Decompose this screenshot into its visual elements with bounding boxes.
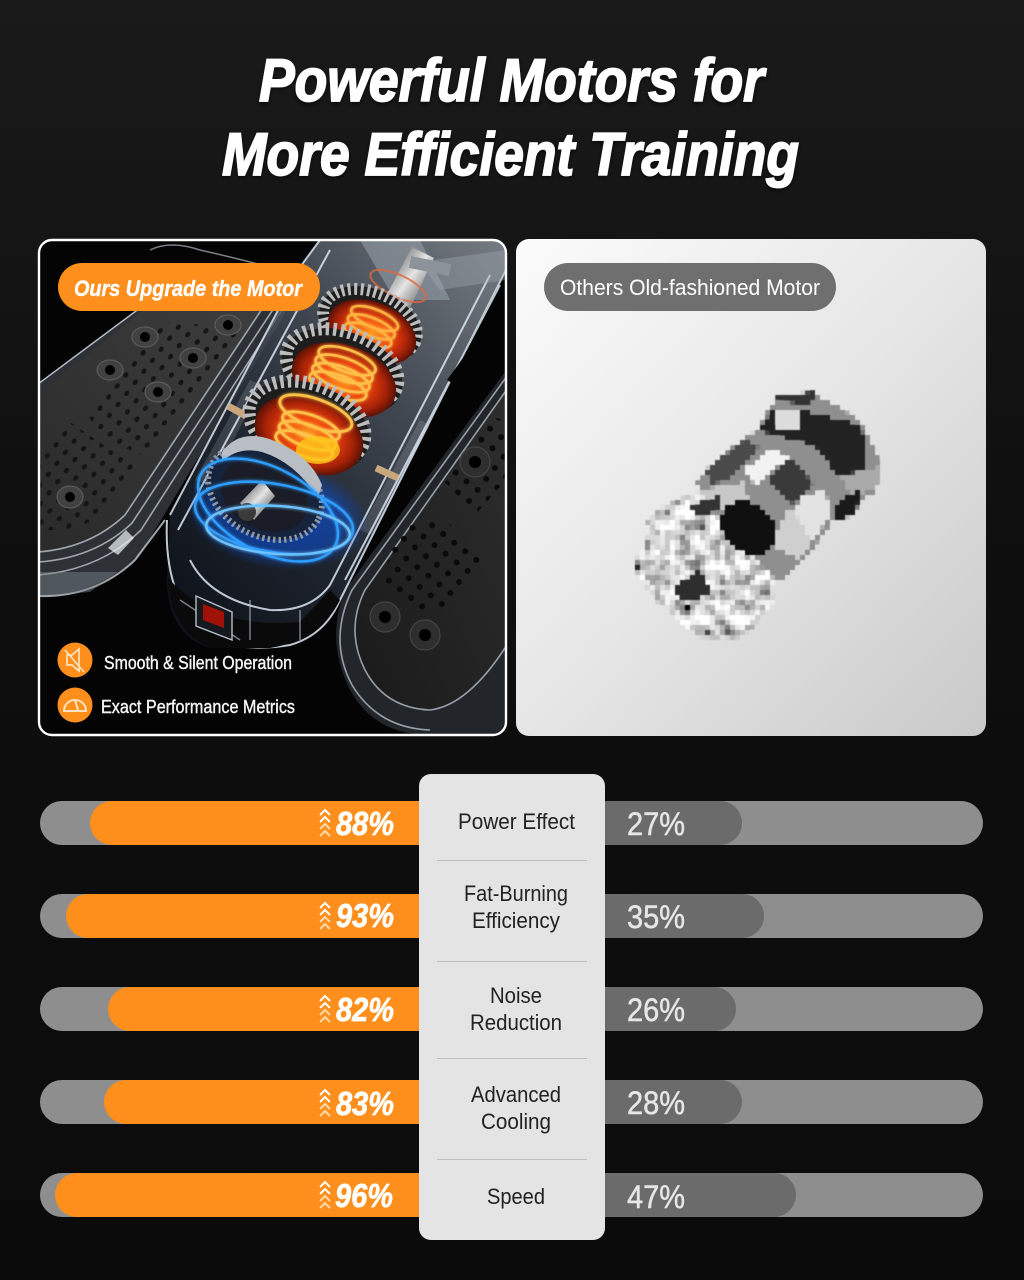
panel border (39, 240, 506, 735)
panel: metric labels: Speed (487, 1184, 545, 1209)
title (222, 47, 799, 188)
icon: suction cups, right pedal (370, 447, 490, 650)
illustration: blue glowing gear (189, 436, 366, 568)
lower motor housing with mottled detail (632, 490, 790, 643)
panel: metric labels: Power Effect (458, 809, 575, 834)
panel: metric labels: Reduction (470, 1010, 562, 1035)
feature: exact performance metrics (58, 688, 295, 722)
row: advanced cooling (40, 1080, 983, 1124)
illustration: gear 2 (280, 322, 404, 418)
badge: others old-fashioned motor: Others Old-fashioned Motor (560, 275, 820, 300)
illustration: gear 3 (242, 374, 372, 476)
icon: suction cups, left pedal (57, 315, 241, 508)
row: speed: 47% (627, 1179, 685, 1215)
panel: metric labels: Cooling (481, 1109, 551, 1134)
row: power effect: 27% (627, 806, 685, 842)
panel: metric labels: Advanced (471, 1082, 561, 1107)
badge: ours upgrade the motor: Ours Upgrade the Motor (74, 276, 303, 301)
panel: metric labels (419, 774, 605, 1240)
badge: ours upgrade the motor (58, 263, 320, 311)
panel: ours upgraded motor (38, 240, 510, 735)
dark centre of motor (675, 490, 786, 602)
title: More Efficient Training (222, 121, 799, 188)
row: fat-burning efficiency: 35% (627, 899, 685, 935)
illustration: left foot pedal (38, 245, 290, 596)
panel: others old-fashioned motor (516, 239, 986, 736)
row: noise reduction: 26% (627, 992, 685, 1028)
feature: smooth and silent operation: Smooth & Silent Operation (104, 653, 292, 673)
row: noise reduction (40, 987, 983, 1031)
upper motor body (697, 392, 882, 583)
row: noise reduction: 82% (336, 991, 394, 1028)
row: advanced cooling: 83% (336, 1085, 394, 1122)
illustration: right foot pedal (336, 365, 510, 735)
panel: metric labels: Efficiency (472, 908, 560, 933)
title: Powerful Motors for (259, 47, 767, 114)
panel: metric labels: Fat-Burning (464, 881, 568, 906)
badge: others old-fashioned motor (544, 263, 836, 311)
row: fat-burning efficiency: 93% (336, 897, 394, 934)
row: speed (40, 1173, 983, 1217)
panel: metric labels: Noise (490, 983, 542, 1008)
feature: exact performance metrics: Exact Performance Metrics (101, 697, 295, 717)
illustration: pixelated motor (620, 380, 900, 660)
feature: smooth and silent operation (58, 642, 292, 678)
chart: comparison bars (40, 774, 983, 1240)
row: power effect (40, 801, 983, 845)
illustration: top shaft (366, 247, 450, 312)
row: advanced cooling: 28% (627, 1085, 685, 1121)
row: power effect: 88% (336, 805, 394, 842)
row: speed: 96% (335, 1177, 393, 1214)
illustration: side pins (228, 406, 398, 478)
illustration: transparent motor housing (167, 240, 510, 648)
illustration: gear 1 (317, 282, 423, 364)
row: fat-burning efficiency (40, 894, 983, 938)
icon: red power switch (196, 596, 232, 640)
